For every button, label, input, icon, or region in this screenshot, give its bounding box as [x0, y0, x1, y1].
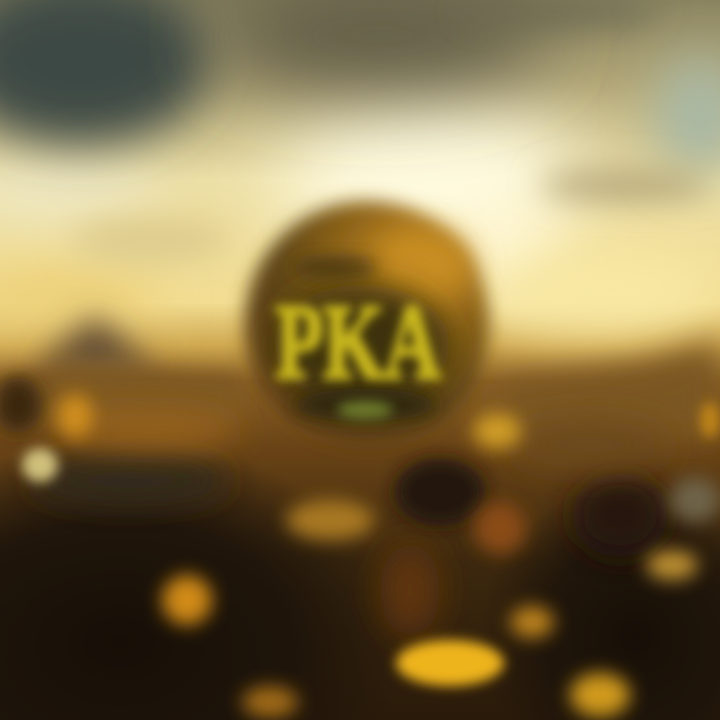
golden sphere	[245, 201, 489, 445]
sky glow	[0, 100, 720, 335]
sphere lettering: PKA	[276, 283, 440, 402]
glowing coins	[22, 394, 720, 718]
clouds	[0, 0, 720, 262]
sphere shadow top	[293, 258, 377, 278]
sphere lower glow	[337, 401, 393, 419]
sphere core shadow	[274, 285, 450, 405]
mountains on the horizon	[0, 316, 720, 440]
sphere highlight	[377, 231, 473, 299]
ground: coin pile	[0, 377, 720, 720]
sphere shadow base	[293, 389, 437, 421]
